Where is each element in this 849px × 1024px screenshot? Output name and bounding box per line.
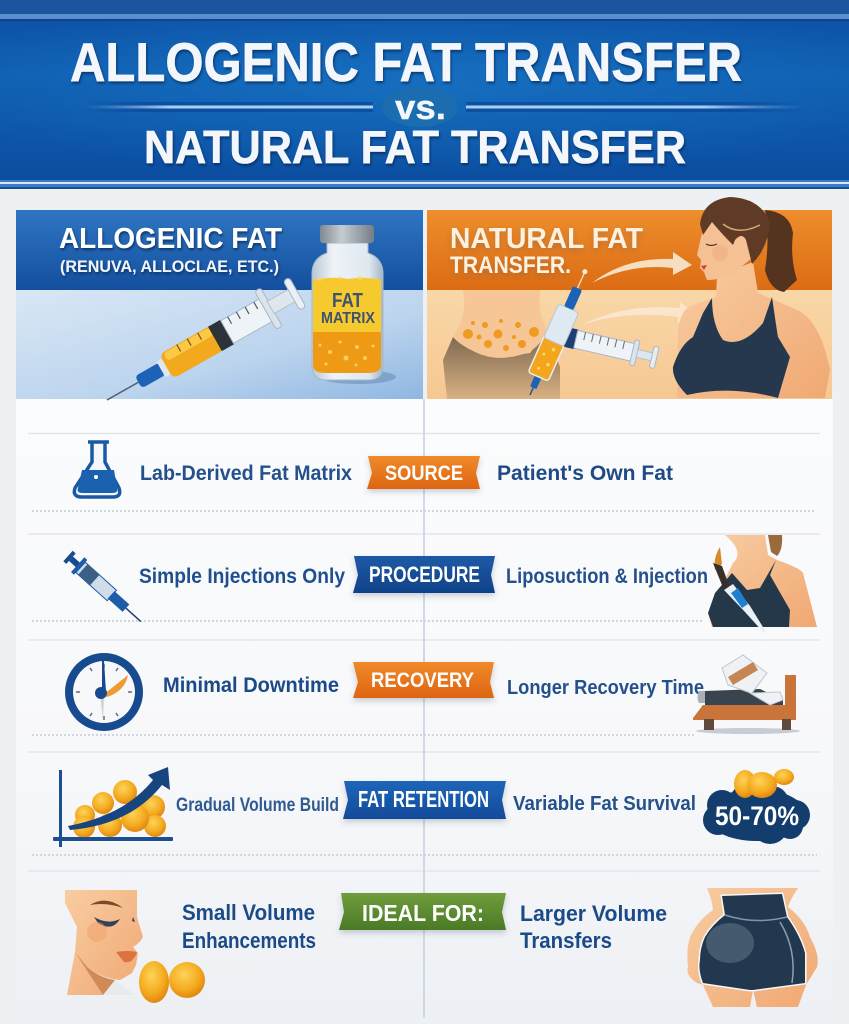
text: small volume: Small Volume — [182, 900, 315, 925]
row 3: recovery — [65, 653, 800, 734]
row 1: source — [74, 442, 673, 497]
panel: allogenic fat header — [16, 210, 423, 419]
row 2: procedure — [61, 535, 817, 633]
ribbon: source: SOURCE — [385, 462, 463, 485]
ribbon: recovery — [353, 662, 494, 698]
ribbon: recovery: RECOVERY — [371, 669, 474, 692]
versus divider: vs. — [395, 89, 446, 127]
text: liposuction: Liposuction & Injection — [506, 565, 708, 588]
row separators — [28, 399, 820, 1018]
icon: clock — [65, 653, 143, 731]
text: minimal downtime: Minimal Downtime — [163, 674, 339, 697]
icon: flask — [74, 442, 120, 497]
icon: blue syringe — [61, 549, 148, 629]
versus divider — [84, 87, 804, 127]
text: longer recovery: Longer Recovery Time — [507, 677, 704, 699]
illustration: woman in sports top — [673, 197, 830, 399]
ribbon: source — [367, 456, 480, 489]
main panel — [16, 399, 833, 1018]
row 4: fat retention — [53, 767, 810, 847]
arrow: lower to chest — [582, 302, 697, 325]
natural heading: NATURAL FAT — [450, 223, 643, 255]
header banner — [0, 0, 849, 189]
icon: hips in shapewear — [687, 888, 818, 1007]
icon: woman torso with syringe — [708, 535, 817, 633]
ribbon: ideal for — [339, 893, 506, 930]
allogenic heading: ALLOGENIC FAT — [59, 223, 282, 255]
icon: vertical syringe — [520, 265, 596, 399]
icon: bed with bandaged leg — [693, 655, 800, 734]
arrow: upper to face — [592, 252, 692, 283]
icon: fat matrix vial: FAT — [332, 290, 363, 312]
text: enhancements: Enhancements — [182, 928, 316, 953]
icon: syringe with fat — [96, 273, 308, 419]
icon: fat matrix vial: MATRIX — [321, 310, 376, 327]
ponytail — [765, 210, 797, 292]
ribbon: procedure — [353, 556, 495, 593]
text: transfers: Transfers — [520, 928, 612, 953]
title line 2: NATURAL FAT TRANSFER — [144, 121, 686, 173]
natural heading line 2: TRANSFER. — [450, 252, 571, 279]
text: larger volume: Larger Volume — [520, 901, 667, 926]
panel: natural fat transfer header — [427, 197, 832, 399]
ribbon: fat retention: FAT RETENTION — [358, 786, 489, 812]
icon: horizontal syringe — [563, 324, 660, 371]
icon: abdomen with fat deposits — [443, 290, 560, 399]
face — [697, 210, 752, 280]
callout: 50-70% cloud: 50-70% — [715, 801, 799, 831]
ribbon: procedure: PROCEDURE — [369, 562, 480, 587]
text: patient's own fat: Patient's Own Fat — [497, 462, 673, 485]
ribbon: ideal for: IDEAL FOR: — [362, 900, 484, 926]
hair — [700, 197, 770, 264]
callout: 50-70% cloud — [703, 769, 810, 844]
title line 1: ALLOGENIC FAT TRANSFER — [70, 31, 742, 93]
icon: fat matrix vial — [312, 225, 396, 384]
text: simple injections: Simple Injections Only — [139, 565, 345, 588]
icon: growth chart with fat balls — [53, 767, 173, 847]
text: lab-derived: Lab-Derived Fat Matrix — [140, 462, 352, 485]
row 5: ideal for — [65, 888, 818, 1007]
text: variable survival: Variable Fat Survival — [513, 793, 696, 815]
ribbon: fat retention — [343, 781, 506, 819]
icon: face with fat drops — [65, 890, 205, 1003]
allogenic subheading: (RENUVA, ALLOCLAE, ETC.) — [60, 257, 279, 276]
sports bra — [673, 297, 790, 398]
torso — [677, 262, 830, 399]
text: gradual volume: Gradual Volume Build — [176, 795, 339, 816]
